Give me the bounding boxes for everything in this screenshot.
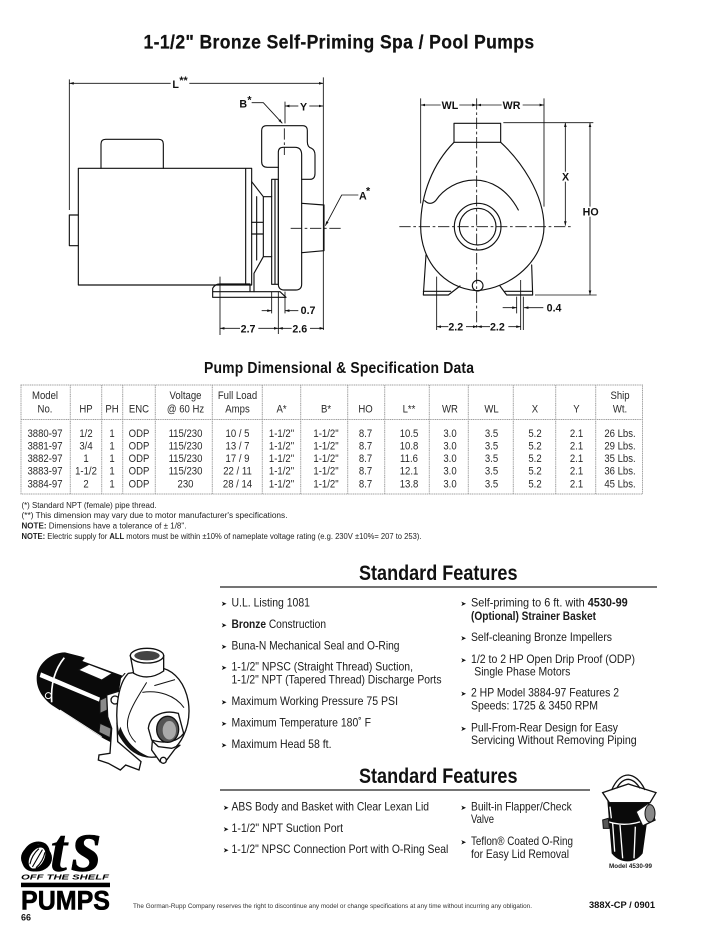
column: HP: 3/4	[79, 441, 93, 453]
pump illustration	[37, 648, 189, 770]
column: ENC: ODP	[129, 441, 149, 453]
column: PH	[105, 404, 119, 491]
column: ship weight: 35 Lbs.	[604, 453, 636, 465]
column: ENC: ODP	[129, 466, 149, 478]
column: A: 1-1/2"	[269, 453, 294, 465]
column: amps: 17 / 9	[226, 453, 250, 465]
column: Y: 2.1	[570, 441, 583, 453]
column: WL: 3.5	[485, 441, 498, 453]
column: X	[528, 404, 542, 491]
column: amps: 13 / 7	[226, 441, 250, 453]
column: ENC	[129, 404, 150, 491]
column: HP: 1/2	[79, 428, 93, 440]
feature list: left column: U.L. Listing 1081	[232, 596, 310, 610]
column: ship weight: 45 Lbs.	[604, 479, 636, 491]
column: voltage: 115/230	[169, 453, 203, 465]
feature list: right column: Self-cleaning Bronze Impellers	[471, 630, 612, 644]
column: voltage: 115/230	[169, 441, 203, 453]
column: WR: 3.0	[443, 466, 457, 478]
feature list: right column: ➤	[460, 656, 466, 664]
column: ship weight: 29 Lbs.	[604, 441, 636, 453]
column: Y: 2.1	[570, 453, 583, 465]
column: L: L**	[403, 404, 415, 416]
column: voltage: Voltage	[170, 390, 202, 402]
motor	[37, 652, 126, 742]
column: B: 1-1/2"	[313, 441, 339, 453]
mounting feet	[423, 255, 533, 295]
column: HP: 1	[83, 453, 89, 465]
column: WR: WR	[442, 404, 458, 416]
feature list: left column: Maximum Head 58 ft.	[232, 737, 332, 751]
column: HO: HO	[358, 404, 373, 416]
column: A: 1-1/2"	[269, 466, 294, 478]
column: PH: 1	[109, 453, 115, 465]
column: X: 5.2	[528, 466, 542, 478]
motor terminal plate	[78, 664, 112, 680]
column: B: B*	[321, 404, 331, 416]
strainer model caption: Model 4530-99	[609, 863, 652, 870]
strainer feature list: right column: Built-in Flapper/Check	[471, 800, 573, 814]
Y dimension: Y	[300, 102, 307, 114]
column: voltage: 115/230	[169, 466, 203, 478]
strainer feature list: right column: ➤	[460, 804, 466, 812]
suction port	[302, 203, 324, 253]
X dimension: X	[562, 172, 570, 184]
column: model: 3880-97	[27, 428, 63, 440]
feature list: left column: ➤	[221, 742, 227, 750]
column: ship weight: 36 Lbs.	[604, 466, 636, 478]
column: HO	[358, 404, 373, 491]
feature list: right column: ➤	[460, 600, 466, 608]
feature list: left column: ➤	[221, 698, 227, 706]
column: WL: 3.5	[485, 479, 498, 491]
column: ENC: ODP	[129, 428, 149, 440]
title: 1-1/2" Bronze Self-Priming Spa / Pool Pumps	[144, 31, 534, 53]
footnotes: NOTE: Dimensions have a tolerance of ± 1/8".	[22, 522, 186, 530]
column: voltage: @ 60 Hz	[167, 404, 204, 416]
column: voltage: 230	[178, 479, 194, 491]
discharge port	[130, 656, 164, 677]
base dimensions: 0.4	[547, 303, 562, 315]
table heading: Pump Dimensional & Specification Data	[204, 360, 475, 377]
logo swirl	[25, 845, 49, 871]
footnotes	[22, 501, 422, 541]
feature list: left column: 1-1/2" NPSC (Straight Thread) Suction,	[232, 660, 413, 674]
column: A: A*	[276, 404, 287, 416]
column: model: 3881-97	[27, 441, 63, 453]
column: ENC: ODP	[129, 453, 149, 465]
L dimension: L	[172, 79, 179, 91]
rear nut	[603, 818, 609, 828]
terminal box	[101, 139, 163, 168]
feature list: left column: 1-1/2" NPT (Tapered Thread) Discharge Ports	[232, 672, 442, 686]
drain plug	[472, 280, 483, 291]
logo: OTS Off the Shelf Pumps	[21, 804, 110, 916]
column: voltage	[167, 390, 204, 491]
column: Y: 2.1	[570, 466, 583, 478]
Y dimension	[285, 102, 323, 123]
column: Y: 2.1	[570, 479, 583, 491]
column: WL: 3.5	[485, 453, 498, 465]
table grid	[21, 385, 642, 494]
column: amps: Full Load	[218, 390, 257, 402]
motor end hatch	[99, 695, 111, 738]
motor highlights	[40, 658, 125, 735]
heading: standard features (strainer): Standard Features	[359, 765, 518, 788]
column: model	[27, 390, 63, 491]
basket highlights	[605, 807, 645, 858]
column: WR: 3.0	[443, 479, 457, 491]
feature list: right column: Single Phase Motors	[474, 665, 570, 679]
L dimension	[69, 75, 323, 330]
document code: 388X-CP / 0901	[589, 900, 656, 911]
column: ENC: ODP	[129, 479, 149, 491]
column: L	[400, 404, 419, 491]
column: PH: 1	[109, 441, 115, 453]
column: WR: 3.0	[443, 441, 457, 453]
feature list: left column: Buna-N Mechanical Seal and O-Ring	[232, 639, 400, 653]
column: amps: Amps	[225, 404, 250, 416]
diagram: pump side view	[69, 75, 371, 335]
feature list: left column	[221, 596, 442, 751]
feature list: left column: ➤	[221, 664, 227, 672]
column: B: 1-1/2"	[313, 479, 339, 491]
column: Y: 2.1	[570, 428, 583, 440]
column: X: 5.2	[528, 479, 542, 491]
front foot	[152, 741, 180, 762]
column: PH: 1	[109, 428, 115, 440]
strainer feature list: left column: ➤	[223, 804, 229, 812]
strainer feature list: right column: ➤	[460, 838, 466, 846]
page number: 66	[21, 912, 31, 924]
column: L: 10.5	[400, 428, 419, 440]
feature list: right column: 2 HP Model 3884-97 Features 2	[471, 686, 619, 700]
base dimensions: 2.6	[292, 323, 307, 335]
discharge neck	[454, 123, 501, 142]
specification table	[21, 385, 642, 494]
side port	[636, 803, 655, 826]
center lines	[399, 98, 573, 330]
B label and leader	[239, 94, 282, 123]
strainer feature list: left column: 1-1/2" NPT Suction Port	[232, 821, 344, 835]
column: B: 1-1/2"	[313, 428, 339, 440]
column: model: Model	[32, 390, 58, 402]
rear knob	[69, 215, 78, 246]
feature list: right column	[460, 596, 637, 747]
WL and WR dimensions: WL	[442, 100, 459, 112]
logo tagline: OFF THE SHELF	[21, 872, 110, 882]
column: X: 5.2	[528, 428, 542, 440]
motor bracket	[252, 182, 272, 292]
B label and leader: *	[247, 94, 252, 106]
feature list: right column: Pull-From-Rear Design for Easy	[471, 720, 618, 734]
strainer feature list: left column: ABS Body and Basket with Clear Lexan Lid	[232, 800, 429, 814]
strainer feature list: left column	[223, 800, 448, 856]
column: HO: 8.7	[359, 428, 372, 440]
column: X: 5.2	[528, 441, 542, 453]
column: A: 1-1/2"	[269, 428, 294, 440]
column: X: 5.2	[528, 453, 542, 465]
column: ENC: ENC	[129, 404, 150, 416]
WL and WR dimensions: WR	[503, 100, 521, 112]
column: L: 12.1	[400, 466, 419, 478]
feature list: right column: (Optional) Strainer Basket	[471, 609, 596, 623]
logo ball	[21, 844, 52, 872]
basket body	[607, 801, 650, 861]
A label and leader: *	[366, 186, 371, 198]
feature list: right column: ➤	[460, 690, 466, 698]
column: HO: 8.7	[359, 479, 372, 491]
column: B	[313, 404, 339, 491]
base dimensions	[437, 277, 562, 334]
footnotes: NOTE: Electric supply for ALL motors must be within ±10% of nameplate voltage rating (e.g. 230V ±10%= 207 to 253).	[22, 532, 422, 541]
column: amps: 22 / 11	[223, 466, 252, 478]
mounting foot	[213, 284, 286, 297]
column: B: 1-1/2"	[313, 466, 339, 478]
column: PH: PH	[105, 404, 119, 416]
diagram: pump front view	[399, 98, 599, 334]
feature list: left column: ➤	[221, 622, 227, 630]
B label and leader: B	[239, 98, 247, 110]
column: X: X	[532, 404, 538, 416]
X dimension	[503, 123, 597, 295]
flange	[272, 179, 278, 284]
column: WL: 3.5	[485, 466, 498, 478]
column: HO: 8.7	[359, 453, 372, 465]
A label and leader	[325, 186, 371, 226]
base dimensions	[220, 277, 324, 335]
feature list: left column: ➤	[221, 643, 227, 651]
A label and leader: A	[359, 190, 367, 202]
column: voltage: 115/230	[169, 428, 203, 440]
column: WL: WL	[484, 404, 499, 416]
heading: standard features (pump): Standard Features	[359, 562, 518, 585]
volute	[117, 668, 189, 757]
column: model: 3882-97	[27, 453, 63, 465]
column: model: 3883-97	[27, 466, 63, 478]
column: WL: 3.5	[485, 428, 498, 440]
column: WL	[484, 404, 499, 491]
discharge port	[262, 126, 315, 179]
volute housing	[278, 147, 302, 290]
motor body	[78, 168, 252, 285]
feature list: left column: ➤	[221, 720, 227, 728]
column: HP: 1-1/2	[75, 466, 97, 478]
logo bar	[21, 883, 110, 887]
column: B: 1-1/2"	[313, 453, 339, 465]
feature list: right column: ➤	[460, 634, 466, 642]
L dimension: **	[179, 75, 188, 87]
HO dimension: HO	[583, 207, 599, 219]
column: HO: 8.7	[359, 441, 372, 453]
strainer feature list: left column: 1-1/2" NPSC Connection Port with O-Ring Seal	[232, 842, 448, 856]
column: HP	[75, 404, 97, 491]
center lines	[284, 128, 343, 228]
column: PH: 1	[109, 466, 115, 478]
motor bracket and foot	[98, 688, 141, 770]
column: HP: HP	[79, 404, 93, 416]
logo wordmark: s	[71, 804, 102, 888]
column: A: 1-1/2"	[269, 479, 294, 491]
strainer feature list: left column: ➤	[223, 846, 229, 854]
column: model: No.	[38, 404, 52, 416]
base dimensions: 0.7	[301, 305, 316, 317]
rule	[220, 789, 590, 791]
column: ship weight: Ship	[610, 390, 630, 402]
feature list: left column: ➤	[221, 600, 227, 608]
feature list: right column: 1/2 to 2 HP Open Drip Proof (ODP)	[471, 652, 635, 666]
column: ship weight: 26 Lbs.	[604, 428, 636, 440]
column: L: 11.6	[400, 453, 418, 465]
rule	[220, 586, 657, 588]
column: PH: 1	[109, 479, 115, 491]
feature list: right column: ➤	[460, 725, 466, 733]
column: model: 3884-97	[27, 479, 63, 491]
suction port rings	[454, 203, 501, 250]
column: ship weight: Wt.	[613, 404, 627, 416]
volute scroll curve	[425, 180, 518, 210]
base dimensions: 2.2	[448, 322, 463, 334]
base dimensions: 2.7	[241, 323, 256, 335]
logo wordmark: o	[21, 817, 52, 885]
footer disclaimer: The Gorman-Rupp Company reserves the right to discontinue any model or change specifications at any time without incurring any obligation.	[133, 903, 532, 910]
feature list: right column: Speeds: 1725 & 3450 RPM	[471, 699, 598, 713]
column: amps: 28 / 14	[223, 479, 252, 491]
lid handle	[612, 775, 645, 790]
suction port	[148, 712, 184, 742]
column: WR: 3.0	[443, 428, 457, 440]
column: HO: 8.7	[359, 466, 372, 478]
column: A: 1-1/2"	[269, 441, 294, 453]
strainer feature list: right column: Teflon® Coated O-Ring	[471, 834, 573, 848]
feature list: left column: Maximum Working Pressure 75 PSI	[232, 694, 398, 708]
volute outline	[421, 142, 544, 291]
feature list: left column: Bronze Construction	[232, 617, 326, 631]
feature list: right column: Self-priming to 6 ft. with 4530-99	[471, 596, 628, 610]
strainer feature list: right column: for Easy Lid Removal	[471, 847, 569, 861]
column: L: 13.8	[400, 479, 419, 491]
logo wordmark: t	[50, 817, 69, 885]
column: HP: 2	[83, 479, 89, 491]
strainer feature list: right column	[460, 800, 573, 861]
column: A	[269, 404, 294, 491]
strainer feature list: left column: ➤	[223, 826, 229, 834]
feature list: left column: Maximum Temperature 180˚ F	[232, 716, 371, 730]
column: Y: Y	[573, 404, 580, 416]
strainer feature list: right column: Valve	[471, 812, 494, 826]
column: L: 10.8	[400, 441, 419, 453]
column: WR: 3.0	[443, 453, 457, 465]
feature list: right column: Servicing Without Removing Piping	[471, 733, 637, 747]
strainer basket illustration	[603, 775, 656, 861]
lid	[603, 784, 656, 803]
logo pumps: PUMPS	[21, 886, 110, 916]
column: Y	[570, 404, 583, 491]
footnotes: (*) Standard NPT (female) pipe thread.	[22, 501, 156, 510]
base dimensions: 2.2	[490, 322, 505, 334]
column: amps	[218, 390, 257, 491]
footnotes: (**) This dimension may vary due to motor manufacturer's specifications.	[22, 511, 288, 520]
WL and WR dimensions	[421, 98, 544, 207]
column: WR	[442, 404, 458, 491]
column: ship weight	[604, 390, 636, 491]
column: amps: 10 / 5	[226, 428, 250, 440]
